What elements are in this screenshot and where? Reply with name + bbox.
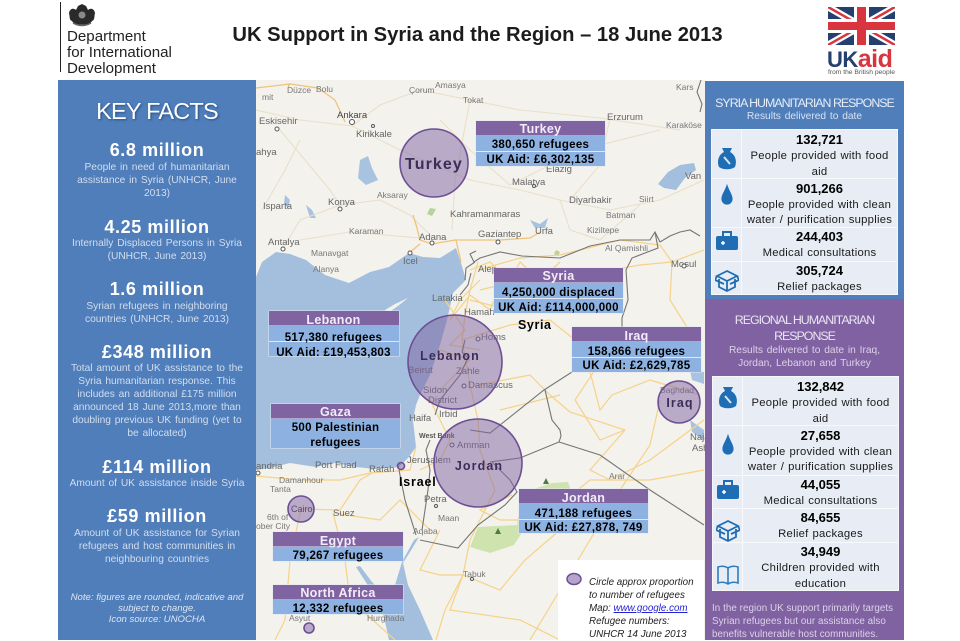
city labels: Syria [518, 318, 552, 332]
city labels: Icel [403, 256, 418, 267]
circle: Jordan: Jordan [455, 459, 503, 473]
map [256, 80, 705, 640]
row: education [717, 543, 880, 590]
city labels: 6th of [267, 512, 289, 522]
heading: SYRIA HUMANITARIAN RESPONSE [715, 96, 894, 110]
city labels: Amman [457, 440, 490, 451]
row: relief [715, 262, 862, 294]
minor roads [256, 90, 704, 250]
icon: food bag [712, 130, 742, 178]
circle: Lebanon: Lebanon [420, 349, 480, 363]
city labels: Malatya [512, 177, 546, 188]
city labels: Manavgat [311, 248, 349, 258]
subheading: Jordan, Lebanon and Turkey [738, 358, 871, 369]
callout: Jordan: 471,188 refugees [535, 508, 632, 520]
panel: Syria humanitarian response [705, 81, 904, 299]
city labels: Erzurum [607, 112, 643, 123]
row: food: People provided with food [751, 397, 890, 409]
fact: 6.8 million: assistance in Syria (UNHCR, June [77, 175, 237, 186]
icon: relief box [713, 509, 743, 542]
note: subject to change. [118, 603, 196, 614]
row: water [712, 179, 897, 228]
icon: medical kit [712, 228, 742, 261]
callout: North Africa: 12,332 refugees [293, 603, 383, 615]
callout: Jordan: Jordan [562, 491, 605, 505]
city labels: Homs [481, 332, 506, 343]
icon: forest markers [495, 478, 549, 534]
fact: 348 million: announced 18 June 2013,more than [73, 402, 241, 413]
UK aid wordmark: UKaid [827, 45, 892, 73]
fact: 59 million: neighbouring countries [105, 554, 209, 565]
panel: key facts [58, 80, 256, 640]
row: education: Children provided with [761, 562, 880, 574]
row: food: aid [813, 413, 828, 425]
callout: Syria: 4,250,000 displaced [502, 287, 615, 299]
city labels: Aqaba [413, 526, 438, 536]
footnote: In the region UK support primarily targets [712, 603, 893, 614]
circle: Turkey [400, 129, 468, 197]
row: food: 132,842 [797, 379, 844, 394]
row: food: aid [812, 166, 827, 178]
row: water: water / purification supplies [748, 461, 893, 473]
city labels: Ankara [337, 110, 368, 121]
fact: 6.8 million: 2013) [144, 188, 170, 199]
callout: Syria: UK Aid: £114,000,000 [498, 302, 619, 314]
heading: key facts: KEY FACTS [96, 98, 218, 124]
city labels: Karaman [349, 226, 384, 236]
row: water [713, 426, 898, 476]
callout: Gaza: refugees [310, 437, 361, 449]
row: medical [713, 476, 898, 509]
row: relief: 84,655 [801, 510, 840, 525]
city labels: Alep [478, 264, 497, 275]
icon: water drop [712, 179, 742, 227]
city labels: Arar [609, 471, 625, 481]
city labels: andria [256, 461, 283, 472]
row: food [713, 377, 898, 426]
legend: UNHCR 14 June 2013 [589, 629, 687, 640]
city labels: Isparta [263, 201, 293, 212]
city labels: Siirt [639, 194, 654, 204]
row: relief [713, 509, 898, 543]
city labels: mit [262, 92, 274, 102]
fact: 348 million [71, 342, 243, 439]
city labels: Alanya [313, 264, 339, 274]
callout: Lebanon [268, 310, 400, 359]
row: medical: Medical consultations [763, 247, 876, 259]
legend: Map: www.google.com [589, 603, 688, 614]
row: water: People provided with clean [749, 446, 892, 458]
circle: Cairo [288, 496, 314, 522]
city labels: ober City [256, 521, 291, 531]
city labels: Kahramanmaras [450, 209, 520, 220]
row: water: People provided with clean [748, 199, 891, 211]
circle: Iraq: Iraq [666, 396, 694, 410]
results table [711, 129, 898, 295]
row: medical [712, 228, 897, 262]
city labels: Urfa [535, 226, 554, 237]
circle: Cairo: Cairo [291, 504, 313, 514]
city labels: Çorum [409, 85, 435, 95]
note: Icon source: UNOCHA [109, 614, 205, 625]
fact: 4.25 million: 4.25 million [104, 217, 210, 237]
major roads [256, 84, 540, 262]
callout: Syria [494, 268, 624, 314]
city labels: Haifa [409, 413, 432, 424]
callout: Egypt [272, 532, 404, 562]
city labels: Elazig [546, 164, 572, 175]
fact: 6.8 million [77, 140, 237, 199]
city labels: Port Fuad [315, 460, 357, 471]
footnote: Syrian refugees but our assistance also [712, 616, 886, 627]
icon: open book [713, 543, 743, 591]
callout: Gaza: Gaza [320, 405, 352, 419]
city labels: Eskisehir [259, 116, 298, 127]
city labels: Beirut [408, 365, 433, 376]
panel: regional humanitarian response [705, 299, 904, 640]
city labels: Gaziantep [478, 229, 521, 240]
city labels: Hamah [464, 307, 495, 318]
city labels: Zahle [456, 366, 480, 377]
callout: Gaza [270, 404, 400, 449]
fact: 1.6 million: Syrian refugees in neighboring [86, 301, 228, 312]
callout: Turkey: Turkey [520, 122, 561, 136]
row: medical: 44,055 [801, 477, 840, 492]
organisation name: Department [67, 28, 146, 45]
legend: Circle approx proportion [589, 577, 694, 588]
city labels: Aksaray [377, 190, 408, 200]
callout: Lebanon: Lebanon [306, 313, 361, 327]
fact: 348 million: Syria humanitarian response. This [78, 376, 236, 387]
logo: UK aid [827, 7, 895, 76]
circle: Lebanon [408, 315, 502, 409]
note [70, 592, 244, 625]
city labels: Karaköse [666, 120, 702, 130]
city labels: Adana [419, 232, 447, 243]
city labels: Amasya [435, 80, 466, 90]
city labels: District [428, 395, 457, 406]
callout: Iraq [572, 326, 702, 372]
row: relief: Relief packages [777, 281, 862, 293]
international borders [399, 80, 704, 548]
city labels: West Bank [419, 433, 455, 440]
icon: royal crest [69, 4, 95, 26]
title: UK Support in Syria and the Region – 18 June 2013 [232, 24, 723, 46]
row: water: water / purification supplies [747, 214, 892, 226]
row: water: 27,658 [801, 428, 840, 443]
city labels: Tokat [463, 95, 484, 105]
fact: 1.6 million: 1.6 million [110, 279, 204, 299]
callout: North Africa: North Africa [300, 586, 376, 600]
row: education: 34,949 [801, 544, 840, 559]
city labels: Kiziltepe [587, 225, 619, 235]
city labels: Jerusalem [407, 455, 451, 466]
row: medical: 244,403 [796, 229, 843, 244]
tagline: from the British people [828, 69, 895, 76]
city labels: Suez [333, 508, 355, 519]
legend: to number of refugees [589, 590, 685, 601]
callout: Jordan [518, 488, 648, 534]
organisation name [60, 2, 176, 72]
fact: 59 million: refugees and host communities in [79, 541, 235, 552]
fact: 6.8 million: People in need of humanitarian [84, 162, 230, 173]
circle: Turkey: Turkey [405, 156, 463, 173]
row: medical: Medical consultations [764, 495, 877, 507]
fact: 1.6 million: countries (UNHCR, June 2013) [85, 314, 229, 325]
city labels: Sidon [423, 385, 447, 396]
logo: Department for International Development [60, 2, 172, 77]
callout: Iraq: UK Aid: £2,629,785 [583, 360, 691, 372]
map base [256, 80, 713, 640]
row: relief: 305,724 [796, 263, 843, 278]
fact: 59 million: £59 million [107, 506, 207, 526]
icon: water drop [713, 426, 743, 475]
city labels: Asyut [289, 613, 311, 623]
icon: medical kit [713, 476, 743, 508]
city labels [256, 80, 713, 623]
city labels: Irbid [439, 409, 457, 420]
footnote [712, 603, 893, 640]
icon: relief box [712, 262, 742, 295]
city labels: Van [685, 171, 701, 182]
fact: 348 million: includes an additional £175 million [77, 389, 237, 400]
city labels: Konya [328, 197, 356, 208]
city labels: Israel [399, 475, 436, 489]
fact: 348 million: Total amount of UK assistance to the [71, 363, 243, 374]
row: relief: Relief packages [778, 528, 863, 540]
row: food [712, 130, 897, 179]
city labels: Damascus [468, 380, 513, 391]
city labels: Mosul [671, 259, 696, 270]
city markers [256, 120, 686, 580]
circle: North Africa [304, 623, 314, 633]
heading: REGIONAL HUMANITARIAN [735, 313, 874, 327]
city labels: Bolu [316, 84, 333, 94]
city labels: ahya [256, 147, 277, 158]
fact: 6.8 million: 6.8 million [110, 140, 204, 160]
city labels: Damanhour [279, 475, 324, 485]
callout: Egypt: Egypt [320, 534, 357, 548]
fact: 59 million [74, 506, 240, 565]
callout: Syria: Syria [542, 269, 575, 283]
subheading: Results delivered to date [747, 111, 862, 122]
callout: Iraq: Iraq [624, 329, 649, 343]
fact: 114 million: £114 million [102, 457, 212, 477]
city labels: Baghdad [660, 385, 694, 395]
results table [712, 376, 899, 591]
organisation name: for International [67, 44, 172, 61]
icon: union flag [828, 7, 895, 45]
city labels: Antalya [268, 237, 300, 248]
city labels: Petra [424, 494, 447, 505]
legend: Refugee numbers: [589, 616, 670, 627]
city labels: Hurghada [367, 613, 405, 623]
fact: 348 million: doubling previous UK funding (yet to [72, 415, 242, 426]
city labels: Kars [676, 82, 693, 92]
subheading [729, 345, 880, 369]
fact: 348 million: be allocated) [127, 428, 187, 439]
fact: 4.25 million [72, 217, 242, 262]
circle: Iraq [658, 381, 700, 423]
callout: Lebanon: 517,380 refugees [285, 332, 382, 344]
icon: food bag [713, 377, 743, 425]
footnote: benefits vulnerable host communities. [712, 629, 878, 640]
city labels: Batman [606, 210, 636, 220]
heading [735, 313, 874, 342]
subheading: Results delivered to date in Iraq, [729, 345, 880, 356]
fact: 114 million [70, 457, 244, 489]
organisation name: Development [67, 60, 156, 77]
city labels: Diyarbakir [569, 195, 612, 206]
legend [558, 560, 704, 640]
callout: Iraq: 158,866 refugees [588, 346, 685, 358]
callout: Lebanon: UK Aid: £19,453,803 [276, 347, 391, 359]
callout: Turkey: UK Aid: £6,302,135 [487, 154, 595, 166]
fact: 4.25 million: (UNHCR, June 2013) [108, 251, 206, 262]
row: food: 132,721 [796, 132, 843, 147]
city labels: Latakia [432, 293, 463, 304]
callout: Gaza: 500 Palestinian [292, 422, 379, 434]
callout: North Africa [272, 584, 404, 615]
note: Note: figures are rounded, indicative and [71, 592, 243, 603]
city labels: Al Qamishli [605, 243, 648, 253]
circle: Jordan [434, 419, 522, 507]
fact: 4.25 million: Internally Displaced Persons in Syria [72, 238, 242, 249]
city labels: Düzce [287, 85, 311, 95]
fact: 59 million: Amount of UK assistance for Syrian [74, 528, 240, 539]
callout: Egypt: 79,267 refugees [293, 550, 383, 562]
heading: RESPONSE [774, 328, 835, 342]
city labels: Maan [438, 513, 460, 523]
fact: 348 million: £348 million [102, 342, 212, 362]
callout: Jordan: UK Aid: £27,878, 749 [524, 522, 643, 534]
row: food: People provided with food [750, 150, 889, 162]
callout: Turkey: 380,650 refugees [492, 139, 589, 151]
row: water: 901,266 [796, 181, 843, 196]
fact: 1.6 million [85, 279, 229, 325]
city labels: Kirikkale [356, 129, 392, 140]
city labels: Rafah [369, 464, 394, 475]
fact: 114 million: Amount of UK assistance inside Syria [70, 478, 244, 489]
callout: Turkey [476, 120, 606, 166]
city labels: Tabuk [463, 569, 486, 579]
city labels: Tanta [270, 484, 291, 494]
circle: Gaza [398, 462, 404, 470]
row: education: education [795, 578, 846, 590]
